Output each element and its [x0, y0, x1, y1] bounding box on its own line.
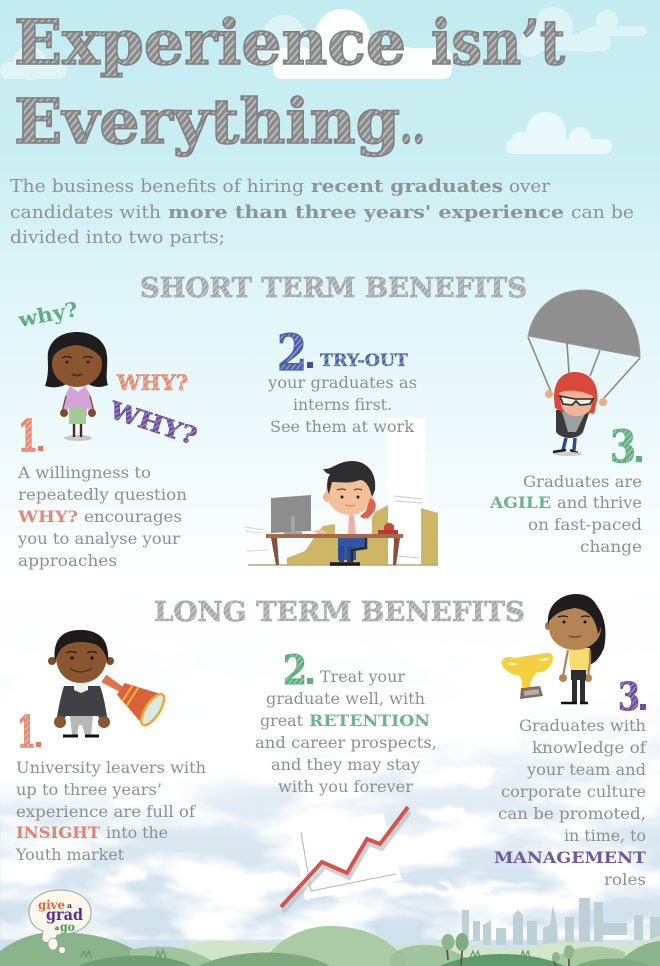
number 3: 3 [610, 422, 636, 473]
text: willingness: repeatedly question [18, 486, 187, 504]
logo: give a grad a go: go [60, 920, 75, 934]
text: management: can be promoted, [498, 805, 646, 823]
number 3 dot [640, 704, 646, 710]
title: Experience [14, 6, 406, 79]
number 1 dot [36, 742, 41, 747]
icon: graduate at desk [245, 418, 438, 565]
title [14, 6, 565, 158]
text: management: in time, to [564, 827, 646, 845]
text: insight: INSIGHT [16, 823, 100, 842]
heading: short term benefits: SHORT TERM BENEFITS [140, 273, 527, 304]
title: .. [400, 96, 425, 155]
intro text: candidates with [10, 202, 161, 223]
intro text: The business benefits of hiring [10, 176, 304, 197]
panel: long term 3 [494, 594, 647, 889]
text: management: Graduates with [519, 717, 646, 735]
text: management: roles [604, 871, 646, 889]
title: Everything [14, 85, 400, 158]
trees [80, 933, 574, 966]
logo: give a grad a go [29, 890, 91, 954]
logo: give a grad a go: give [38, 898, 65, 912]
text: willingness: A willingness to [17, 464, 151, 482]
text: retention: with you forever [278, 778, 414, 796]
number 2 dot [307, 362, 313, 368]
chart: rising line on paper [281, 807, 410, 912]
skyline [462, 898, 660, 945]
panel: short term 3 [489, 290, 642, 556]
text: insight [15, 759, 206, 864]
text: management: MANAGEMENT [494, 848, 646, 867]
panel: short term 1 [15, 297, 201, 570]
why words [15, 297, 201, 451]
why words: WHY? [105, 395, 201, 451]
text: agile [489, 473, 642, 556]
text: interns [267, 374, 417, 436]
text: willingness: WHY? [17, 507, 78, 526]
number 1 dot [38, 446, 43, 451]
logo: give a grad a go: grad [46, 905, 83, 924]
text: willingness [17, 464, 187, 570]
text: agile: on fast-paced [528, 516, 642, 534]
text: insight: experience are full of [16, 803, 196, 821]
icon: parachutist [528, 290, 640, 456]
text: retention: great [260, 712, 304, 730]
icon: trophy [502, 653, 553, 699]
text: management: corporate culture [501, 783, 646, 801]
text: retention [255, 668, 437, 796]
text: interns: your graduates as [267, 374, 417, 392]
panel: long term 2 [255, 647, 437, 912]
text: willingness: approaches [18, 552, 117, 570]
text: willingness: you to analyse your [17, 530, 181, 548]
number 2: 2 [283, 647, 307, 694]
intro text: more than three years' experience [168, 202, 564, 223]
top clouds [0, 7, 647, 154]
text: insight: up to three years’ [16, 781, 162, 799]
text: retention: and career prospects, [255, 734, 437, 752]
number 2: 2 [277, 323, 307, 382]
text: agile: Graduates are [523, 473, 642, 491]
text: insight: Youth market [15, 846, 125, 864]
text: retention: graduate well, with [266, 690, 425, 708]
intro text: over [509, 176, 550, 197]
logo: give a grad a go: a [67, 901, 72, 910]
why words: WHY? [116, 370, 188, 395]
text: agile: change [580, 538, 642, 556]
title: isn’t [431, 6, 565, 79]
text: interns: See them at work [270, 418, 415, 436]
text: retention: and they may stay [271, 756, 420, 774]
number 1: 1 [17, 708, 36, 758]
try-out heading: TRY-OUT [320, 351, 408, 371]
intro text: divided into two parts; [10, 227, 225, 248]
text: management: knowledge of [532, 739, 647, 757]
number 1: 1 [18, 412, 38, 462]
intro text: recent graduates [311, 176, 503, 197]
icon: woman with trophy [545, 594, 605, 703]
why words: why? [15, 297, 80, 332]
number 2 dot [307, 678, 313, 684]
text: willingness: encourages [84, 508, 182, 526]
text: management: your team and [526, 761, 646, 779]
text: insight: into the [106, 824, 168, 842]
icon: man with telescope [48, 630, 168, 736]
panel: long term 1 [15, 630, 206, 864]
text: agile: and thrive [557, 494, 642, 512]
logo: give a grad a go: a [55, 925, 59, 932]
intro text: can be [571, 202, 634, 223]
number 3: 3 [618, 674, 640, 719]
lower sky clouds [0, 640, 660, 944]
intro text [10, 176, 634, 248]
text: management [494, 717, 647, 889]
text: insight: University leavers with [16, 759, 206, 777]
number 3 dot [636, 456, 642, 462]
text: retention: Treat your [320, 668, 406, 686]
text: agile: AGILE [489, 493, 551, 512]
icon: questioning woman [45, 332, 108, 441]
text: interns: interns first. [293, 396, 392, 414]
heading: long term benefits: LONG TERM BENEFITS [154, 597, 525, 628]
panel: short term 2 [245, 323, 438, 565]
text: retention: RETENTION [309, 711, 430, 730]
hills [0, 926, 660, 966]
